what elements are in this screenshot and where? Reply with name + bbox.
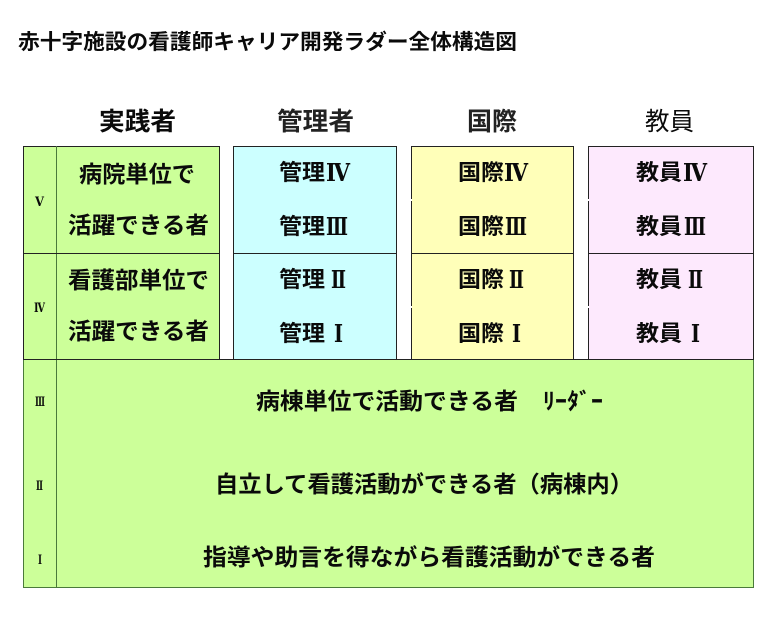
panel: international track: Ⅰ [512, 319, 521, 348]
panel: manager track: 管理 [279, 267, 325, 292]
panel: manager track: Ⅱ [331, 265, 346, 294]
panel: international track: 国際 [458, 160, 504, 185]
panel: international track: Ⅲ [505, 212, 527, 241]
panel: practitioner upper levels: 病院単位で [79, 161, 195, 187]
panel: practitioner upper levels: 活躍できる者 [68, 212, 209, 238]
panel: educator track: 教員 [636, 214, 682, 239]
panel: educator track: 教員 [636, 267, 682, 292]
panel: manager track: 管理 [279, 321, 325, 346]
panel: educator track [588, 146, 754, 360]
panel: educator track: Ⅱ [688, 265, 703, 294]
panel: educator track: Ⅳ [683, 158, 708, 187]
panel: international track: 国際 [458, 321, 504, 346]
panel: practitioner upper levels [23, 146, 220, 360]
panel: practitioner upper levels: 活躍できる者 [68, 318, 209, 344]
panel: practitioner upper levels: 看護部単位で [68, 267, 209, 293]
column headings [99, 108, 694, 136]
panel: shared levels I to III: 指導や助言を得ながら看護活動ができる者 [203, 544, 655, 570]
panel: manager track [233, 146, 396, 360]
panel: shared levels I to III: Ⅰ [38, 553, 42, 568]
panel: manager track: Ⅳ [326, 158, 351, 187]
panel: manager track: Ⅰ [334, 319, 343, 348]
panel: manager track: Ⅲ [326, 212, 348, 241]
panel: international track: 国際 [458, 214, 504, 239]
panel: manager track: 管理 [279, 214, 325, 239]
panel: shared levels I to III: ﾘｰﾀﾞｰ [543, 388, 603, 414]
panel: international track: Ⅱ [509, 265, 524, 294]
title: 赤十字施設の看護師キャリア開発ラダー全体構造図 [18, 30, 517, 54]
panel: shared levels I to III: Ⅲ [35, 395, 45, 410]
panel: educator track: Ⅰ [691, 319, 700, 348]
column headings: 国際 [467, 108, 517, 136]
panel: international track: Ⅳ [504, 158, 529, 187]
column headings: 管理者 [277, 108, 354, 136]
panel: educator track: 教員 [636, 160, 682, 185]
column headings: 教員 [645, 108, 694, 136]
panel: practitioner upper levels: Ⅳ [34, 301, 45, 316]
column headings: 実践者 [99, 108, 176, 136]
panel: educator track: 教員 [636, 321, 682, 346]
panel: shared levels I to III: Ⅱ [36, 479, 43, 494]
panel: international track [411, 146, 574, 360]
panel: international track: 国際 [458, 267, 504, 292]
panel: educator track: Ⅲ [684, 212, 706, 241]
panel: practitioner upper levels: Ⅴ [34, 195, 45, 210]
panel: manager track: 管理 [279, 160, 325, 185]
panel: shared levels I to III: 病棟単位で活動できる者 [256, 388, 518, 414]
panel: shared levels I to III [23, 360, 754, 588]
panel: shared levels I to III: 自立して看護活動ができる者（病棟内） [215, 471, 633, 497]
